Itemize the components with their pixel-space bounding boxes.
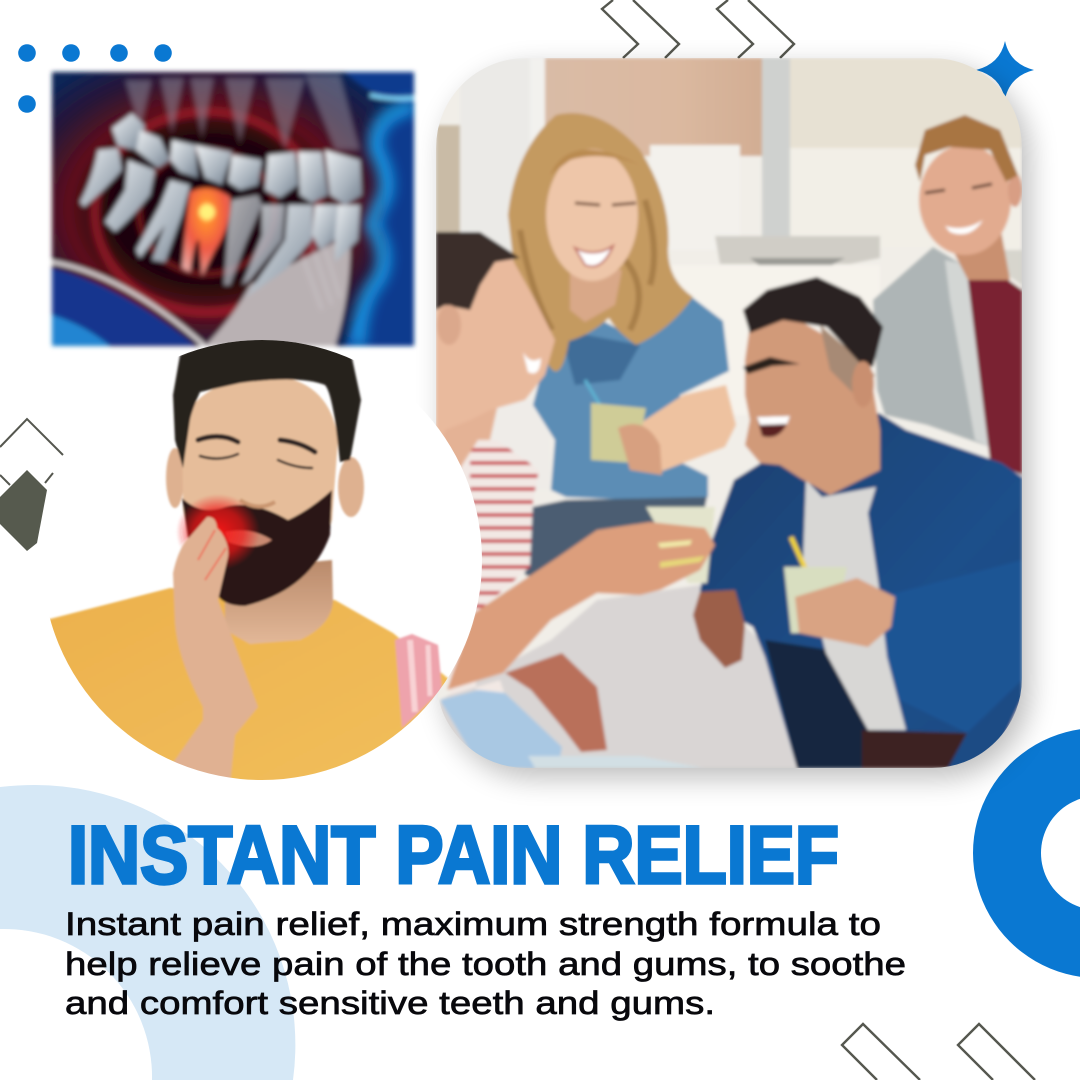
title: INSTANT PAIN RELIEF bbox=[68, 810, 839, 901]
dot grid bbox=[18, 44, 172, 113]
upper teeth row bbox=[112, 113, 362, 205]
arm and hand reaching with glass bbox=[447, 507, 715, 690]
neck bbox=[225, 560, 333, 644]
photo background: kitchen bbox=[436, 58, 1022, 768]
x-ray image of teeth bbox=[52, 72, 414, 346]
glowing painful tooth bbox=[182, 188, 230, 276]
upper tooth roots bbox=[125, 75, 360, 150]
red pain glow bbox=[176, 494, 260, 570]
decorative light blue ring, bottom left bbox=[0, 785, 295, 1080]
description text: Instant pain relief, maximum strength formula to bbox=[65, 906, 881, 942]
icon: blue four-point star bbox=[976, 41, 1034, 99]
ears bbox=[166, 448, 184, 508]
decorative chevrons, top bbox=[602, 0, 794, 58]
sofa bbox=[440, 585, 810, 768]
person: blonde woman in denim shirt bbox=[508, 113, 736, 590]
lower teeth row bbox=[80, 148, 360, 298]
eyes and brows bbox=[198, 436, 315, 468]
hand on cheek and forearm bbox=[170, 517, 258, 785]
decorative chevrons, bottom right bbox=[842, 1024, 1035, 1080]
face bbox=[182, 378, 340, 526]
hand finger lines bbox=[198, 530, 226, 580]
person: woman in striped top bbox=[436, 232, 555, 700]
yellow t-shirt bbox=[50, 586, 448, 780]
person: front man in denim jacket bbox=[693, 277, 1022, 768]
description text: and comfort sensitive teeth and gums. bbox=[65, 985, 715, 1021]
group photo of laughing friends bbox=[436, 58, 1022, 768]
decorative blue ring, bottom right bbox=[973, 728, 1080, 978]
pink striped towel bbox=[395, 634, 442, 728]
group photo panel shadow bbox=[444, 68, 1030, 778]
person: woman's lower hand and blue cloth bbox=[440, 653, 703, 768]
white circle behind toothache man bbox=[42, 340, 482, 780]
nose shade bbox=[240, 500, 275, 507]
description text bbox=[65, 906, 906, 1021]
beard bbox=[182, 490, 332, 606]
decorative diamond shapes, left bbox=[0, 419, 63, 551]
toothache man portrait bbox=[40, 337, 450, 800]
description text: help relieve pain of the tooth and gums, to soothe bbox=[65, 946, 906, 982]
hair bbox=[173, 337, 361, 468]
person: man in grey shirt, back right bbox=[873, 115, 1022, 475]
